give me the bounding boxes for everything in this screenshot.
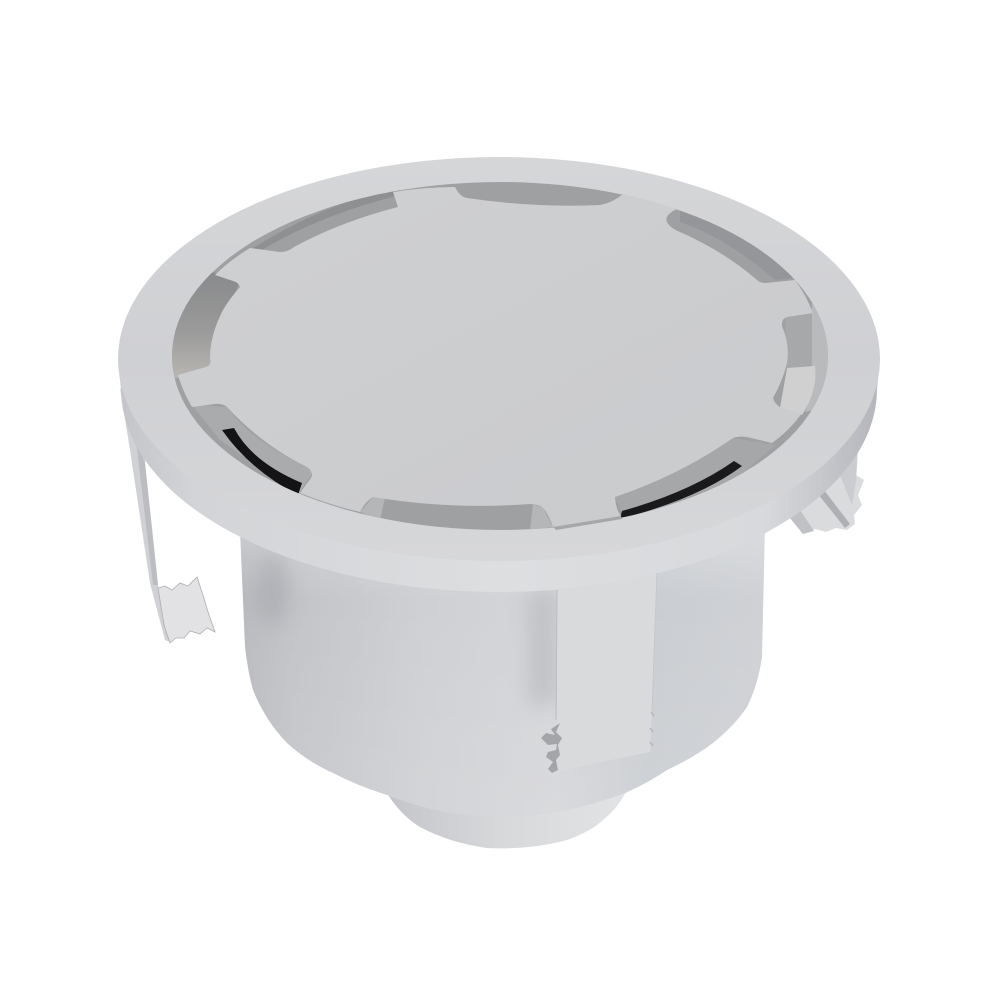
recess: right outer wall bbox=[805, 303, 828, 412]
recess: upper left shading bbox=[250, 186, 400, 250]
recess: bottom black crescent right bbox=[620, 461, 742, 519]
flange top surface bbox=[118, 157, 880, 561]
recess: bottom notch highlight bbox=[360, 497, 384, 518]
right spring clip bbox=[790, 448, 864, 534]
strap serrated end bbox=[541, 723, 562, 773]
flange outer side band bbox=[118, 186, 880, 592]
recess: right notch upper block bbox=[785, 308, 815, 370]
drain opening recess bbox=[168, 182, 832, 530]
cylindrical drain body bbox=[240, 525, 765, 817]
recess: right notch lower light bbox=[780, 366, 815, 415]
front strap on body bbox=[541, 573, 657, 773]
recess: bottom-left strip bbox=[192, 405, 313, 495]
product photo: round metal floor drain bbox=[118, 157, 880, 848]
recess: bottom black crescent left bbox=[222, 428, 302, 495]
bottom outlet spout bbox=[385, 790, 627, 848]
recess: left notch bbox=[172, 272, 238, 378]
recess: upper right shading bbox=[680, 210, 795, 280]
left spring clip bbox=[120, 388, 215, 643]
recess: bottom strip right bbox=[638, 473, 742, 514]
cover plate tab sliver bbox=[553, 516, 622, 530]
slotted cover plate bbox=[178, 187, 813, 530]
